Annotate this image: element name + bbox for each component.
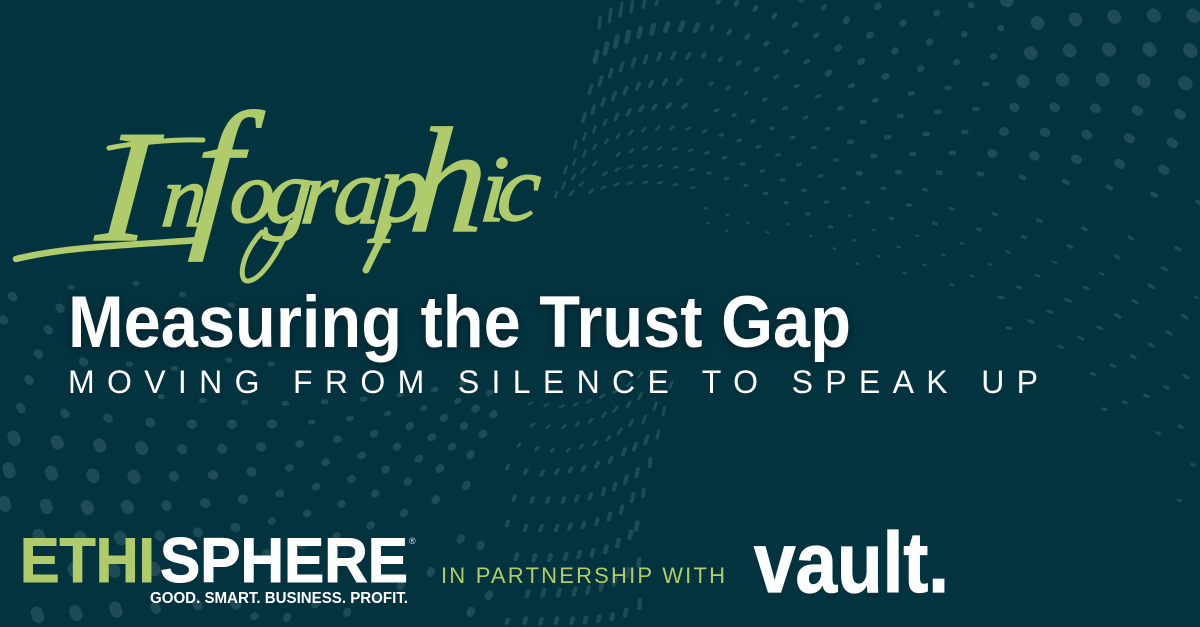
registered mark: ® xyxy=(409,536,416,546)
word Infographic: i xyxy=(477,136,512,242)
script heading: Infographic xyxy=(16,79,550,281)
brush tail of the p xyxy=(366,225,388,270)
word Infographic: I xyxy=(91,97,167,275)
word Infographic: r xyxy=(298,143,342,243)
brush top bar of the I xyxy=(109,140,203,148)
word Infographic: n xyxy=(158,148,211,246)
word Infographic: c xyxy=(494,135,545,241)
logo tagline: GOOD. SMART. BUSINESS. PROFIT. xyxy=(150,590,408,607)
word Infographic: o xyxy=(227,144,279,242)
subtitle: MOVING FROM SILENCE TO SPEAK UP xyxy=(68,364,1038,400)
logo word part: ETHI: ETHI xyxy=(20,526,155,596)
word Infographic: f xyxy=(187,79,268,262)
logo word part: SPHERE: SPHERE xyxy=(160,526,408,596)
brush tail of the g xyxy=(242,222,291,281)
title: Measuring the Trust Gap xyxy=(68,282,851,363)
word Infographic: h xyxy=(405,97,494,264)
word Infographic: a xyxy=(330,138,387,244)
word Infographic: g xyxy=(263,142,316,242)
partnership text: IN PARTNERSHIP WITH xyxy=(441,563,725,588)
logo: vault: vault. xyxy=(754,516,949,611)
logo: Ethisphere xyxy=(20,526,416,607)
word Infographic: p xyxy=(368,132,433,243)
brush swash under the I xyxy=(16,240,200,259)
